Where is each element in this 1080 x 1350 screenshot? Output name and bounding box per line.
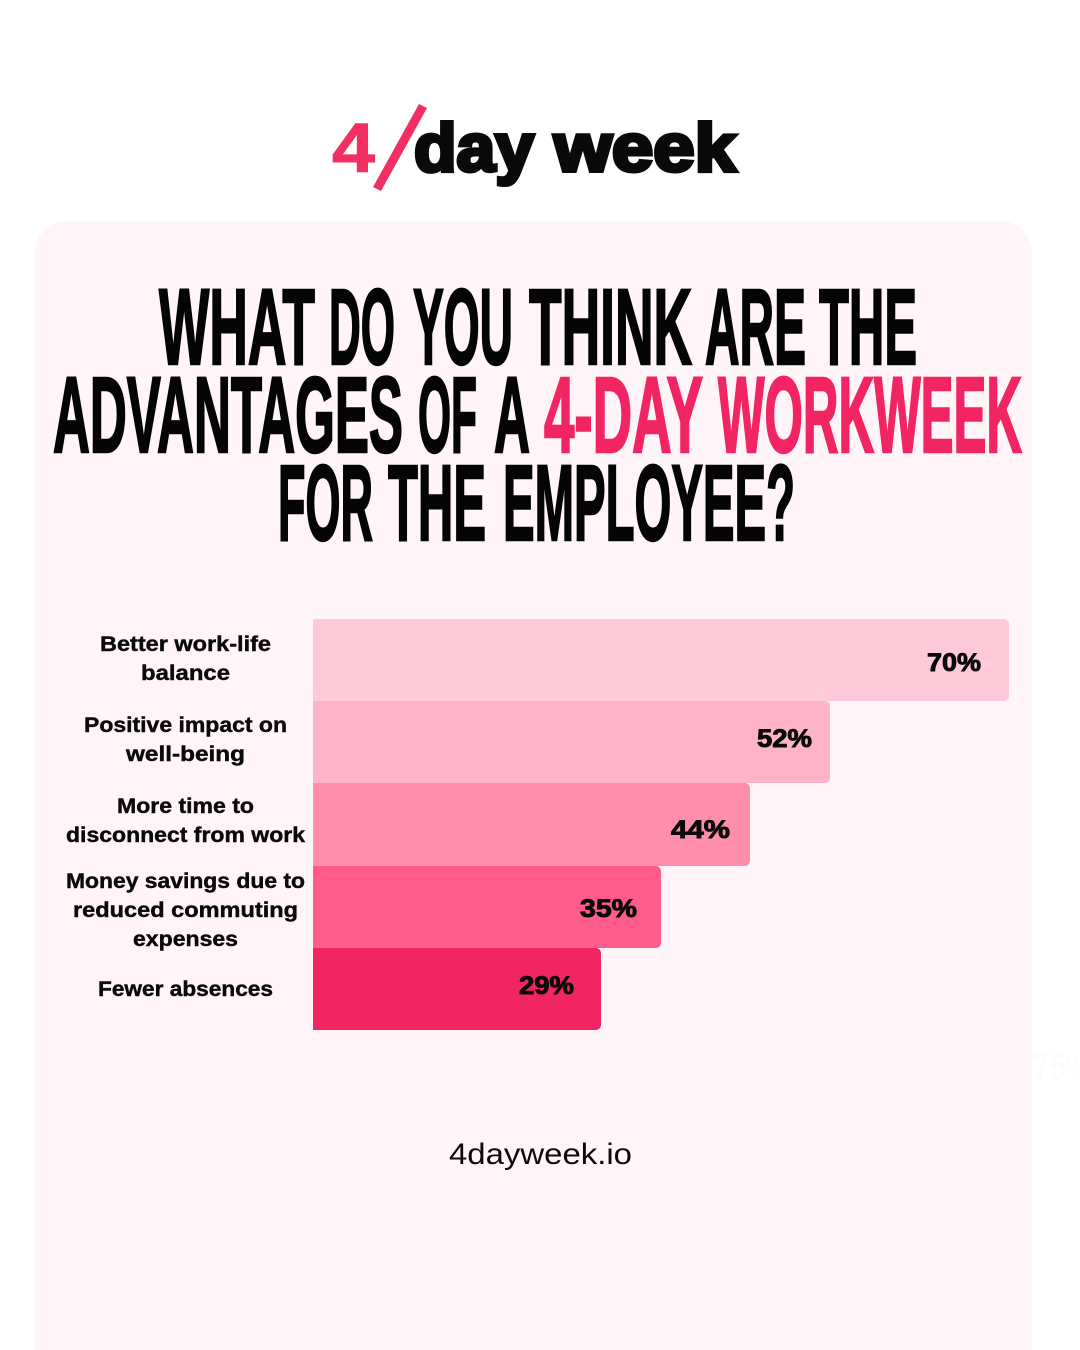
heading: survey question (53, 266, 1022, 563)
label: positive impact on well-being: Positive impact on (84, 713, 287, 737)
bar: positive impact on well-being 52% (313, 701, 830, 783)
heading line 2 black part: OF (418, 354, 477, 475)
label: money savings due to reduced commuting expenses (66, 869, 305, 951)
bar chart (313, 619, 1009, 1030)
heading line 1: YOU (413, 266, 513, 387)
heading line 1: DO (329, 266, 395, 387)
heading: survey question: A (494, 354, 530, 475)
bar: better work-life balance 70%: 70% (927, 649, 981, 677)
heading line 2 highlighted part (544, 354, 1022, 475)
bar: fewer absences 29%: 29% (519, 972, 574, 1000)
heading line 2 highlighted part: 4-DAY (544, 354, 703, 475)
panel: main card (35, 221, 1032, 1350)
heading line 3: THE (388, 442, 486, 563)
heading line 2 black part: ADVANTAGES (53, 354, 403, 475)
heading line 2 black part (53, 354, 530, 475)
heading line 3: FOR (278, 442, 373, 563)
bar: more time to disconnect 44%: 44% (671, 816, 730, 844)
label: positive impact on well-being (84, 713, 287, 766)
logo slash (373, 104, 427, 191)
bar: positive impact on well-being 52%: 52% (757, 725, 812, 753)
logo: 4/day week (332, 104, 736, 191)
bar: fewer absences 29% (313, 948, 601, 1030)
label: more time to disconnect from work: More time to (117, 794, 254, 818)
label: better work-life balance: balance (141, 661, 230, 685)
heading line 1: WHAT (159, 266, 315, 387)
label: money savings due to reduced commuting expenses: expenses (133, 927, 238, 951)
bar: money savings 35%: 35% (580, 895, 637, 923)
heading line 1: ARE (705, 266, 806, 387)
label: money savings due to reduced commuting expenses: Money savings due to (66, 869, 305, 893)
label: positive impact on well-being: well-being (125, 742, 245, 766)
heading line 1 (159, 266, 917, 387)
logo numeral 4: 4 (332, 109, 375, 187)
label: better work-life balance (100, 632, 271, 685)
bar: more time to disconnect 44% (313, 783, 750, 866)
heading line 1: THINK (529, 266, 692, 387)
bar: money savings 35% (313, 866, 661, 948)
label: more time to disconnect from work: disconnect from work (66, 823, 305, 847)
footer url: 4dayweek.io (449, 1138, 632, 1171)
logo wordmark: week: week (553, 110, 736, 186)
label: fewer absences: Fewer absences (98, 977, 273, 1001)
logo wordmark: day: day (414, 110, 534, 186)
bar: better work-life balance 70% (313, 619, 1009, 701)
label: better work-life balance: Better work-life (100, 632, 271, 656)
label: more time to disconnect from work (66, 794, 305, 847)
heading line 3 (278, 442, 795, 563)
heading: survey question: THE (819, 266, 917, 387)
category labels (66, 632, 305, 1001)
label: money savings due to reduced commuting expenses: reduced commuting (73, 898, 298, 922)
